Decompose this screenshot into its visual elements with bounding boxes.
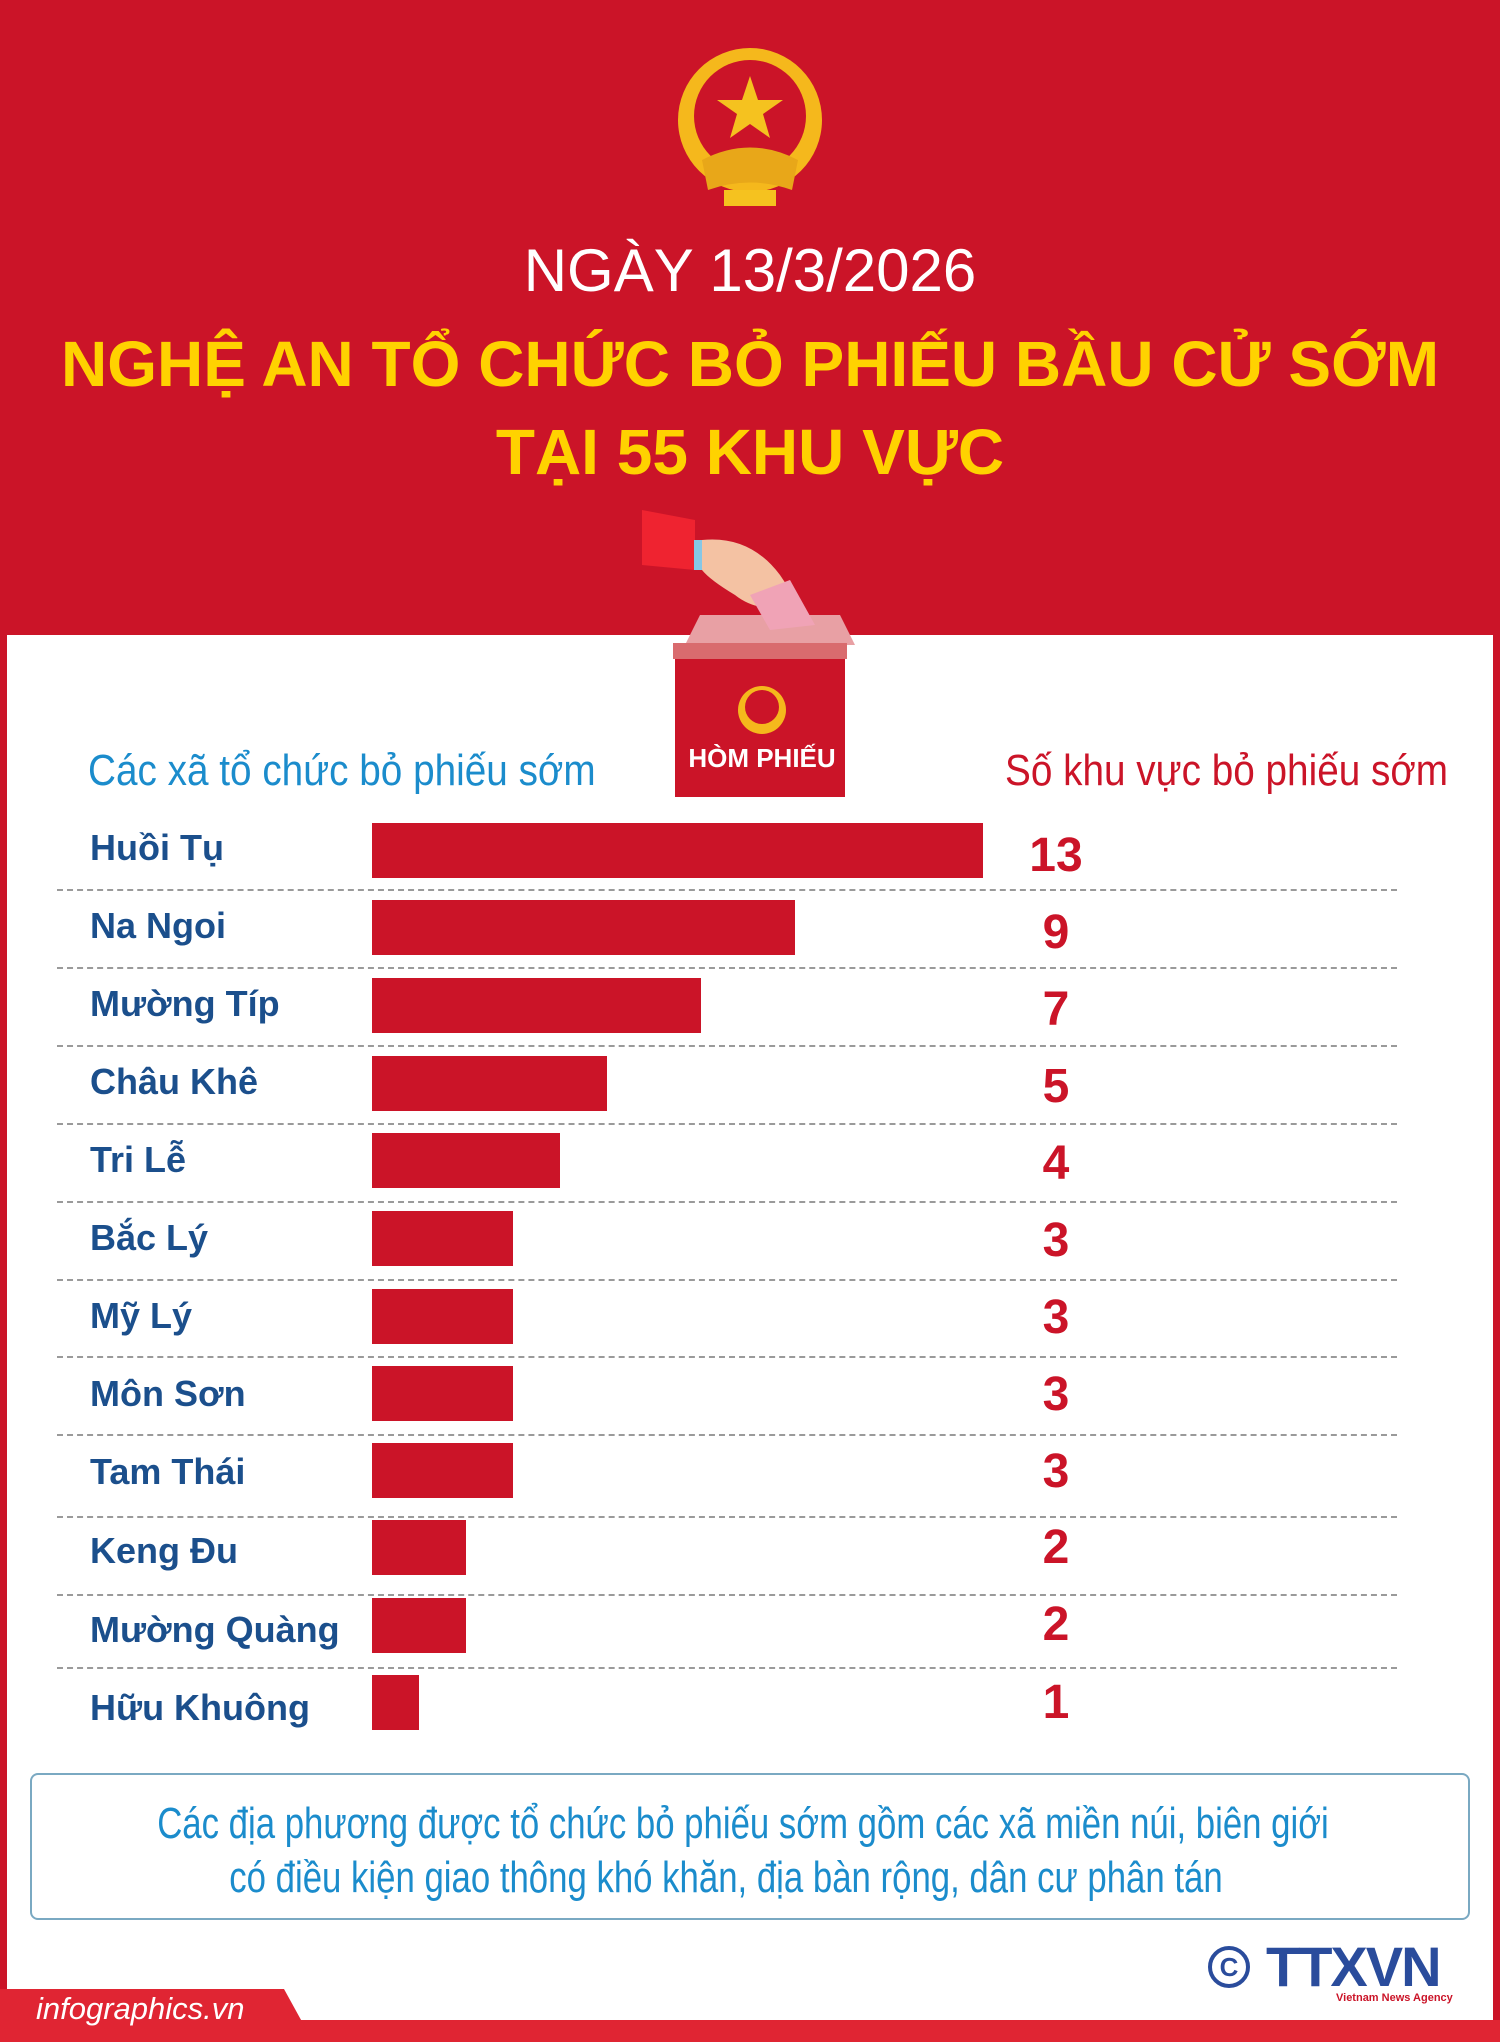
bar chart: 9 (1043, 906, 1069, 959)
bar chart: Tam Thái (90, 1451, 245, 1492)
bar chart: 4 (1043, 1137, 1069, 1190)
bar chart: Môn Sơn (90, 1373, 246, 1414)
bar chart: 2 (1043, 1521, 1069, 1574)
emblem (678, 48, 822, 206)
bar chart: Châu Khê (90, 1061, 258, 1102)
bar chart: Keng Đu (90, 1530, 238, 1571)
bar chart: Tri Lễ (90, 1139, 186, 1180)
bar chart: 13 (1029, 829, 1083, 882)
callout note: có điều kiện giao thông khó khăn, địa bàn rộng, dân cư phân tán (229, 1853, 1223, 1902)
title: NGHỆ AN TỔ CHỨC BỎ PHIẾU BẦU CỬ SỚM (61, 328, 1439, 400)
bar chart: Hữu Khuông (90, 1687, 310, 1728)
bar chart: 3 (1043, 1291, 1069, 1344)
footer: infographics.vn (0, 1989, 301, 2026)
bar chart: Mường Quàng (90, 1609, 340, 1650)
title: TẠI 55 KHU VỰC (496, 416, 1004, 488)
icon: ballot box: HÒM PHIẾU (688, 743, 836, 773)
bar chart: 7 (1043, 983, 1069, 1036)
icon: ballot box (642, 510, 855, 797)
bar chart: 3 (1043, 1368, 1069, 1421)
bar chart (57, 823, 1397, 1730)
callout note: Các địa phương được tổ chức bỏ phiếu sớm gồm các xã miền núi, biên giới (157, 1799, 1329, 1848)
bar chart: Mỹ Lý (90, 1295, 192, 1336)
footer: infographics.vn: infographics.vn (36, 1991, 245, 2026)
bar chart: 2 (1043, 1598, 1069, 1651)
footer bar (0, 2020, 1500, 2042)
logo: TTXVN: TTXVN (1266, 1935, 1440, 1998)
white panel (7, 635, 1493, 2020)
heading: areas: Số khu vực bỏ phiếu sớm (1005, 746, 1448, 795)
bar chart: 3 (1043, 1445, 1069, 1498)
title (61, 328, 1439, 488)
bar chart: Na Ngoi (90, 905, 226, 946)
logo: TTXVN: C (1220, 1952, 1238, 1982)
heading: communes: Các xã tổ chức bỏ phiếu sớm (88, 746, 596, 795)
bar chart: Bắc Lý (90, 1217, 208, 1258)
bar chart: 3 (1043, 1214, 1069, 1267)
logo: TTXVN: Vietnam News Agency (1336, 1992, 1453, 2004)
callout note (30, 1773, 1470, 1920)
date heading: NGÀY 13/3/2026 (524, 237, 976, 304)
bar chart: Huồi Tụ (90, 827, 224, 868)
bar chart: 5 (1043, 1060, 1069, 1113)
bar chart: Mường Típ (90, 983, 280, 1024)
logo: TTXVN (1208, 1935, 1453, 2004)
bar chart: 1 (1043, 1676, 1069, 1729)
